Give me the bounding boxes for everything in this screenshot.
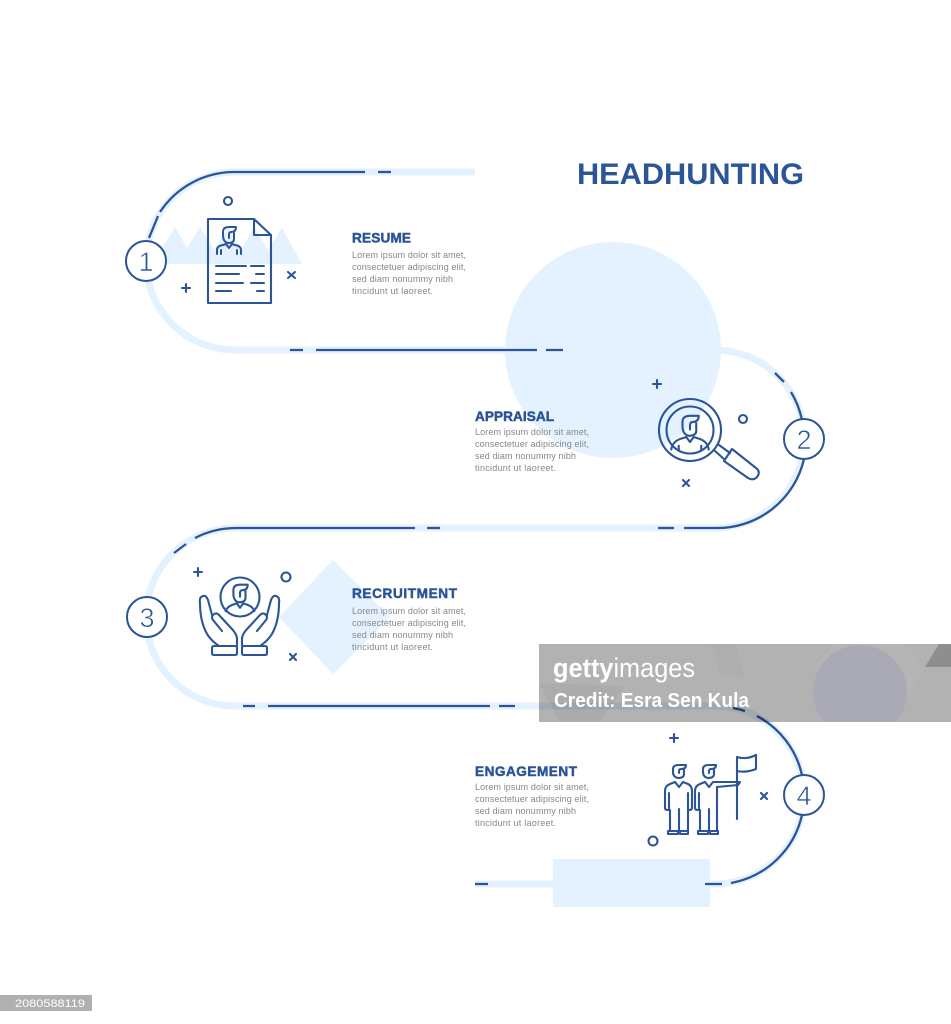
winding path: dark segments xyxy=(149,172,804,884)
background shape: diamond xyxy=(279,560,390,674)
text block: appraisal: Lorem ipsum dolor sit amet, xyxy=(475,427,589,437)
text block: appraisal xyxy=(475,409,589,473)
watermark banner: gettyimages xyxy=(553,653,695,683)
text block: engagement: sed diam nonummy nibh xyxy=(475,806,576,816)
background shape: circle xyxy=(505,242,721,458)
text block: recruitment: sed diam nonummy nibh xyxy=(352,630,453,640)
text block: resume: tincidunt ut laoreet. xyxy=(352,286,433,296)
step 4 number badge xyxy=(784,775,824,815)
image id tag: 2080588119 xyxy=(15,998,85,1010)
text block: appraisal: sed diam nonummy nibh xyxy=(475,451,576,461)
background shape: triangles xyxy=(160,227,302,264)
text block: resume: consectetuer adipiscing elit, xyxy=(352,262,466,272)
icon: magnifier with person xyxy=(659,399,759,479)
step 1 number badge: 1 xyxy=(138,247,154,277)
watermark banner: Credit: Esra Sen Kula xyxy=(554,690,750,712)
watermark banner xyxy=(539,644,951,722)
text block: recruitment xyxy=(352,586,466,652)
text block: engagement: Lorem ipsum dolor sit amet, xyxy=(475,782,589,792)
decorative marks: step 3 xyxy=(194,568,296,660)
icon: resume document xyxy=(208,219,271,303)
image id tag xyxy=(0,995,92,1011)
icon: team with flag xyxy=(665,755,756,834)
step 2 number badge xyxy=(784,419,824,459)
text block: resume: RESUME xyxy=(352,230,411,246)
text block: resume xyxy=(352,230,466,296)
text block: resume: Lorem ipsum dolor sit amet, xyxy=(352,250,466,260)
step 3 number badge: 3 xyxy=(139,603,155,633)
step 4 number badge: 4 xyxy=(796,781,812,811)
icon: hands holding person xyxy=(200,578,279,655)
decorative marks: step 2 xyxy=(653,380,747,486)
text block: recruitment: RECRUITMENT xyxy=(352,586,458,601)
step 2 number badge: 2 xyxy=(796,425,812,455)
title: HEADHUNTING xyxy=(577,158,804,191)
text block: appraisal: tincidunt ut laoreet. xyxy=(475,463,556,473)
text block: recruitment: consectetuer adipiscing elit, xyxy=(352,618,466,628)
text block: recruitment: tincidunt ut laoreet. xyxy=(352,642,433,652)
text block: engagement: ENGAGEMENT xyxy=(475,764,578,779)
step 3 number badge xyxy=(127,597,167,637)
text block: appraisal: consectetuer adipiscing elit, xyxy=(475,439,589,449)
background shape: rectangle xyxy=(553,859,710,907)
text block: recruitment: Lorem ipsum dolor sit amet, xyxy=(352,606,466,616)
text block: resume: sed diam nonummy nibh xyxy=(352,274,453,284)
text block: engagement xyxy=(475,764,589,828)
decorative marks: step 1 xyxy=(182,197,295,292)
step 1 number badge xyxy=(126,241,166,281)
text block: appraisal: APPRAISAL xyxy=(475,409,554,424)
text block: engagement: consectetuer adipiscing elit, xyxy=(475,794,589,804)
winding path: light track xyxy=(146,172,804,884)
decorative marks: step 4 xyxy=(648,734,767,846)
text block: engagement: tincidunt ut laoreet. xyxy=(475,818,556,828)
